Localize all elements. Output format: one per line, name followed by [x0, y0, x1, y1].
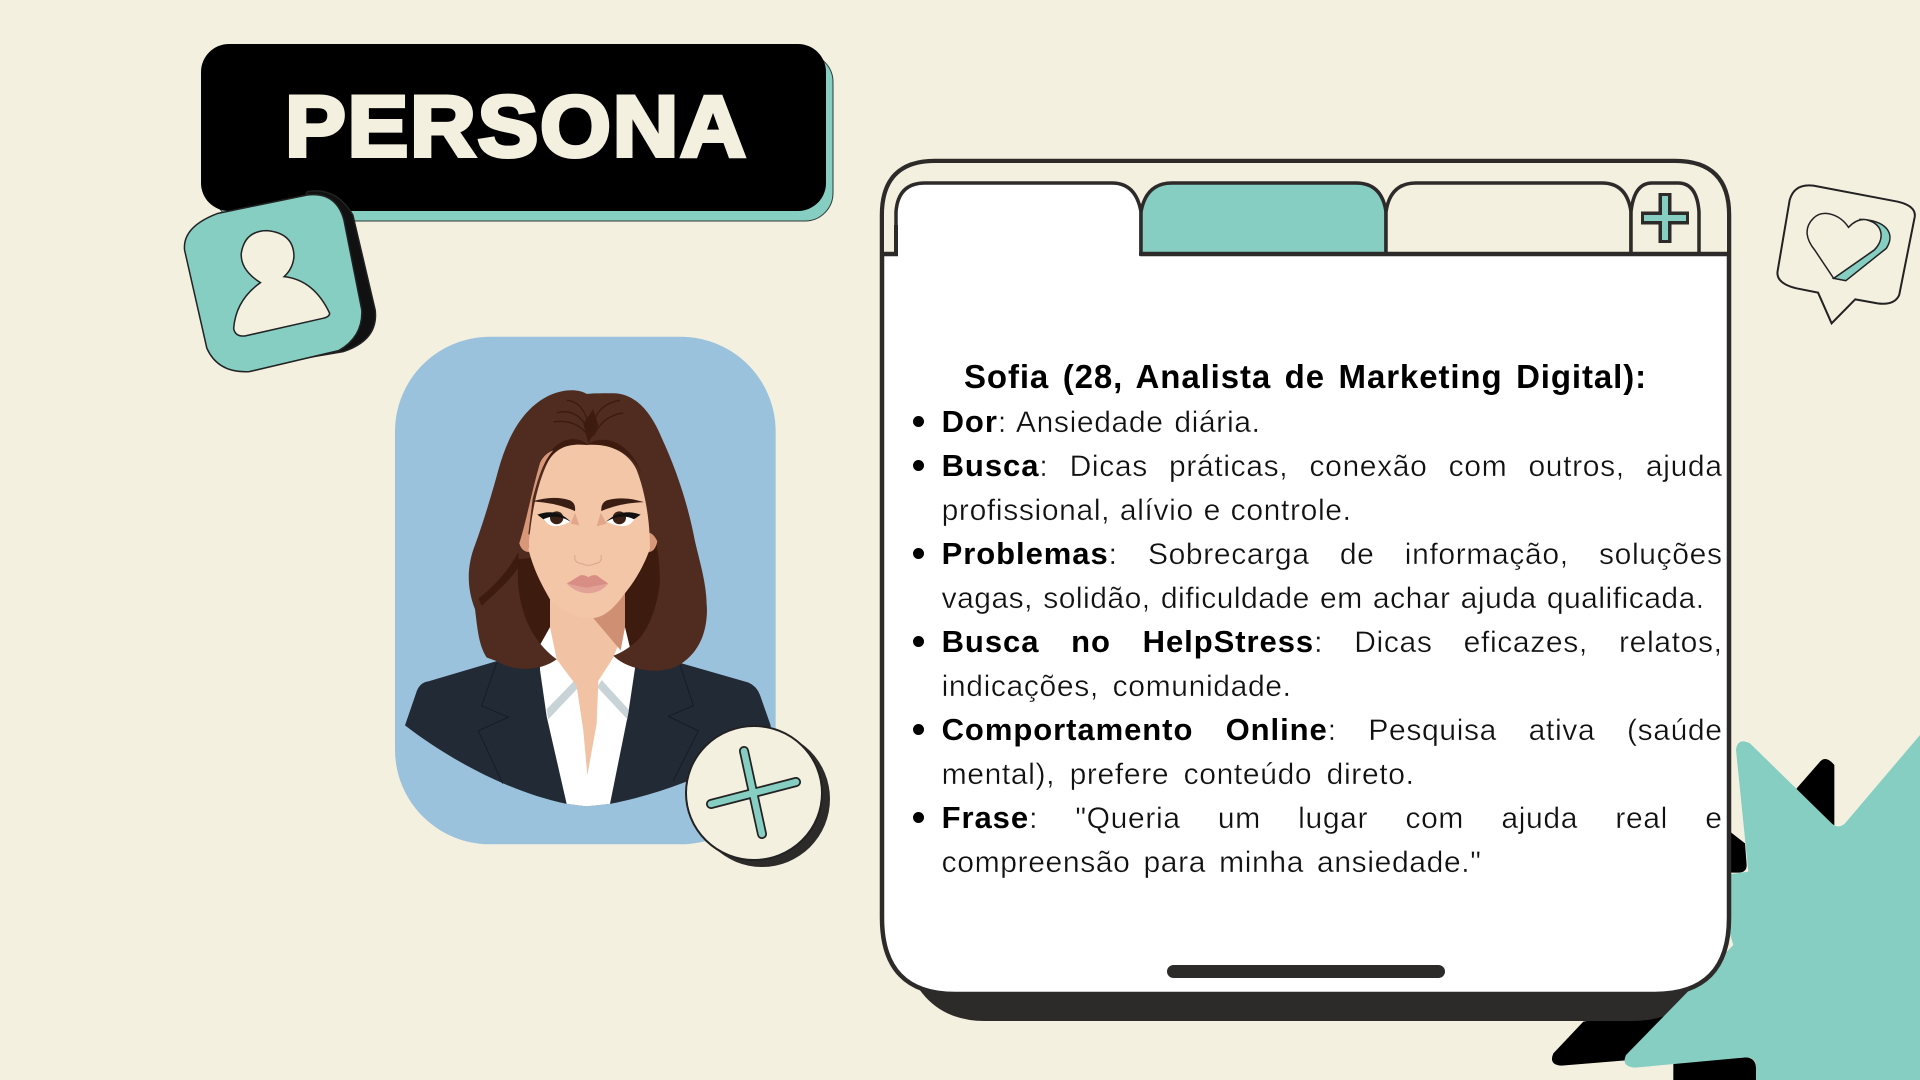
card drop shadow — [905, 960, 1705, 1021]
bullet — [913, 460, 924, 471]
card body — [882, 161, 1729, 994]
heart front — [1807, 213, 1881, 278]
hair under shadow — [518, 545, 660, 656]
item: Problemas line 1: Problemas: Sobrecarga de informação, soluções — [942, 536, 1723, 571]
item: Frase line 1: Frase: "Queria um lugar com ajuda real e — [942, 800, 1723, 835]
plus sign — [711, 751, 796, 834]
item: Busca line 1: Busca: Dicas práticas, conexão com outros, ajuda — [942, 448, 1723, 483]
browser-style card — [882, 161, 1729, 994]
bullet — [913, 416, 924, 427]
bubble outline — [1777, 185, 1915, 323]
badge shadow — [694, 731, 830, 867]
lapel lines — [478, 663, 698, 784]
item: Busca no HelpStress line 1: Busca no HelpStress: Dicas eficazes, relatos, — [942, 624, 1723, 659]
active white tab — [896, 183, 1141, 254]
item: Dor: Dor: Ansiedade diária. — [942, 404, 1261, 439]
collar grey stripes — [547, 680, 628, 719]
ears — [519, 532, 657, 552]
hair strands — [553, 400, 623, 436]
temple shadow — [519, 450, 553, 549]
decorative star: black back layer — [1552, 759, 1834, 1080]
banner black plate — [201, 44, 826, 211]
bullet — [913, 812, 924, 823]
eyebrows — [533, 498, 644, 511]
title text: PERSONA — [285, 78, 748, 174]
jacket — [405, 661, 771, 806]
item: Busca line 2: profissional, alívio e controle. — [942, 494, 1352, 527]
portrait blue background — [395, 337, 776, 844]
hair parting shadow — [542, 409, 642, 474]
small plus tab — [1631, 183, 1699, 254]
tab edge redraw — [882, 215, 1729, 256]
item: Frase line 2: compreensão para minha ansiedade." — [942, 846, 1482, 879]
lower lip — [567, 584, 608, 593]
cream tab — [1386, 183, 1631, 254]
item: Busca no HelpStress line 2: indicações, comunidade. — [942, 670, 1292, 703]
icon: heart speech bubble — [1777, 185, 1915, 323]
heart teal side — [1834, 219, 1890, 281]
bullet — [913, 724, 924, 735]
plus badge — [686, 726, 830, 867]
white patch removing the line below active tab — [898, 240, 1139, 262]
card text block — [913, 358, 1723, 879]
badge circle — [686, 726, 822, 860]
bullet — [913, 548, 924, 559]
decorative star: teal front layer — [1625, 735, 1920, 1080]
face — [528, 445, 650, 618]
darker hair strand — [478, 552, 519, 606]
home bar — [1167, 965, 1445, 978]
icon: person tile — [184, 191, 376, 372]
portrait panel — [395, 337, 776, 844]
hair back — [469, 390, 707, 671]
eye socket shadows — [571, 513, 607, 526]
nose — [575, 555, 601, 565]
lips — [567, 575, 608, 588]
title banner — [201, 44, 833, 221]
neck and chest — [550, 591, 625, 775]
banner teal shadow — [215, 54, 833, 221]
neck shadow — [593, 588, 625, 650]
right eye — [606, 511, 641, 526]
bullet — [913, 636, 924, 647]
item: Comportamento line 2: mental), prefere conteúdo direto. — [942, 758, 1415, 791]
left eye — [537, 511, 571, 526]
icon: plus in tab — [1641, 193, 1689, 243]
item: Comportamento line 1: Comportamento Online: Pesquisa ativa (saúde — [942, 712, 1723, 747]
heading: Sofia (28, Analista de Marketing Digital): — [964, 358, 1647, 395]
shirt — [540, 627, 635, 806]
card top bar — [884, 163, 1727, 254]
item: Problemas line 2: vagas, solidão, dificuldade em achar ajuda qualificada. — [942, 582, 1705, 615]
front hair locks — [477, 534, 707, 670]
tab baseline — [882, 252, 1729, 256]
teal tab — [1141, 183, 1386, 254]
